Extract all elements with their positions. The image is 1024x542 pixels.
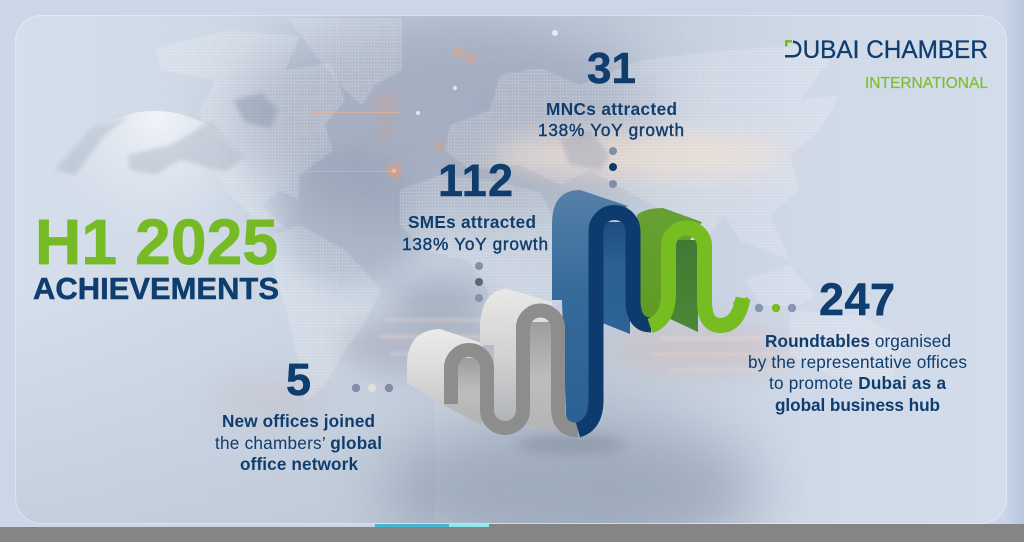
bottom band: [0, 524, 1024, 542]
stat: 112 SMEs attracted: 112: [438, 155, 513, 206]
title: H1 2025: [35, 206, 278, 278]
logo mark: [785, 40, 802, 58]
stat: 5 new offices: office network: [240, 454, 358, 474]
connector dots: 247: [755, 304, 796, 312]
green ribbon tip: [733, 297, 748, 315]
globe: [56, 111, 244, 196]
connector dots: 5: [352, 384, 393, 392]
stat: 31 MNCs attracted: 31: [587, 44, 636, 93]
green ribbon front: [650, 228, 743, 326]
warm light streaks: [380, 318, 800, 372]
stat: 112 SMEs attracted: [402, 155, 548, 254]
stat: 5 new offices: 5: [286, 354, 311, 405]
stat: 247 Roundtables: [748, 274, 967, 415]
middle white face: [480, 289, 552, 425]
stat: 247 Roundtables: by the representative offices: [748, 352, 967, 372]
city light glows: [300, 30, 558, 178]
blue ribbon inner face: [600, 222, 630, 334]
gray ribbon front: [451, 310, 578, 430]
blue ribbon side face: [552, 190, 628, 425]
stat: 31 MNCs attracted: MNCs attracted: [546, 99, 677, 119]
stat: 247 Roundtables: global business hub: [775, 395, 940, 415]
stat: 112 SMEs attracted: SMEs attracted: [408, 212, 536, 232]
stat: 5 new offices: [215, 354, 382, 474]
logo subtitle: INTERNATIONAL: [865, 75, 988, 92]
left white face: [407, 329, 490, 405]
ribbon ground shadow: [515, 435, 625, 453]
navy ribbon front: [578, 212, 651, 430]
stat: 5 new offices: the chambers’ global: [215, 433, 382, 453]
stat: 112 SMEs attracted: 138% YoY growth: [402, 234, 548, 254]
stat: 31 MNCs attracted: 138% YoY growth: [538, 120, 684, 140]
logo: Dubai Chamber International: [785, 36, 988, 92]
connector dots: 31: [609, 147, 617, 188]
stat: 5 new offices: New offices joined: [222, 411, 375, 431]
stat: 247 Roundtables: to promote Dubai as a: [769, 373, 946, 393]
gray inner faces: [443, 322, 570, 438]
stat: 31 MNCs attracted: [538, 44, 684, 140]
3D ribbon chart: [407, 190, 748, 438]
title: ACHIEVEMENTS: [33, 271, 279, 306]
connector dots: 112: [475, 262, 483, 302]
green ribbon inner face: [668, 240, 698, 332]
stat: 247 Roundtables: Roundtables organised: [765, 331, 951, 351]
green ribbon side face: [637, 208, 702, 320]
world map continents: [155, 18, 905, 402]
stat: 247 Roundtables: 247: [819, 274, 895, 325]
